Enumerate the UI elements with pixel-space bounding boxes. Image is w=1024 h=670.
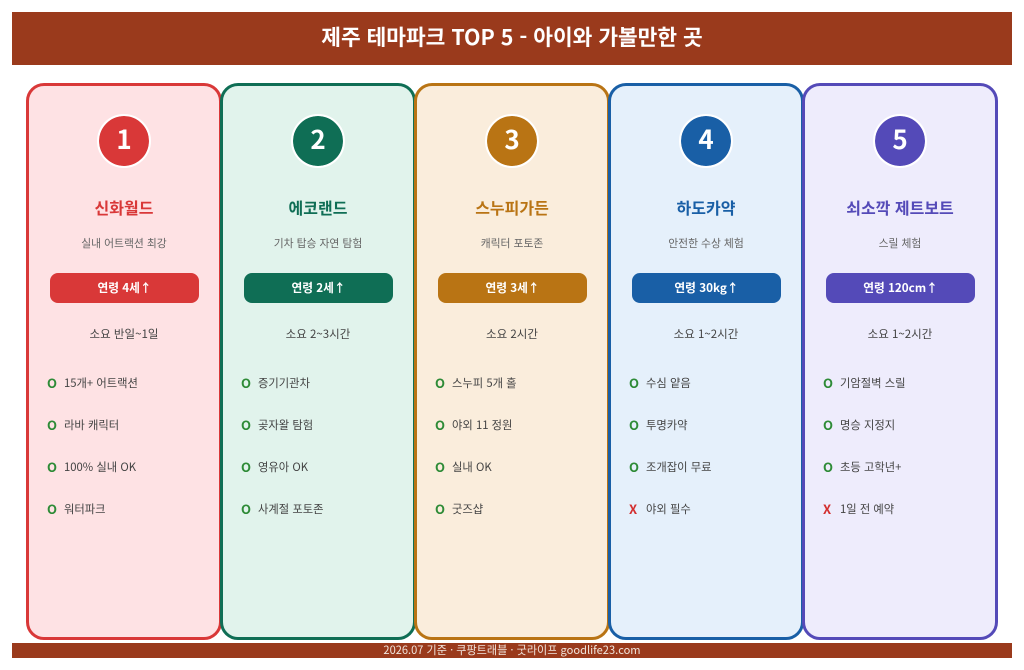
item: 기암절벽 스릴 — [840, 375, 906, 391]
panel: 스누피가든 — [414, 83, 610, 640]
park name: 신화월드 — [95, 195, 153, 219]
description: 안전한 수상 체험 — [668, 235, 744, 251]
item: 100% 실내 OK — [64, 459, 136, 475]
item: 명승 지정지 — [840, 417, 895, 433]
item — [435, 499, 483, 518]
description: 캐릭터 포토존 — [481, 235, 543, 251]
item — [241, 415, 313, 434]
item: 영유아 OK — [258, 459, 308, 475]
item: 투명카약 — [646, 417, 688, 433]
item — [47, 499, 106, 518]
age badge: 연령 3세↑ — [485, 279, 540, 296]
panel: 신화월드 — [26, 83, 222, 640]
item: X — [823, 499, 831, 518]
item: 실내 OK — [452, 459, 492, 475]
item — [823, 499, 894, 518]
item — [629, 499, 691, 518]
title: 제주 테마파크 TOP 5 - 아이와 가볼만한 곳 — [321, 21, 703, 52]
rank badge 4: 4 — [698, 120, 714, 157]
item: O — [241, 457, 251, 476]
item — [435, 415, 512, 434]
item — [629, 415, 688, 434]
description: 스릴 체험 — [879, 235, 921, 251]
item — [435, 457, 492, 476]
footer: 2026.07 기준 · 쿠팡트래블 · 굿라이프 goodlife23.com — [383, 642, 641, 658]
item: 1일 전 예약 — [840, 501, 894, 517]
item: O — [435, 457, 445, 476]
item: O — [823, 373, 833, 392]
item — [47, 457, 136, 476]
item — [823, 457, 901, 476]
rank badge 5 — [873, 114, 927, 168]
item: O — [823, 457, 833, 476]
item: O — [241, 499, 251, 518]
age badge: 연령 120cm↑ — [863, 279, 938, 296]
rank badge 3: 3 — [504, 120, 520, 157]
item — [47, 373, 138, 392]
item — [629, 457, 712, 476]
age badge — [632, 273, 781, 303]
item: 워터파크 — [64, 501, 106, 517]
item: 스누피 5개 홀 — [452, 375, 517, 391]
item — [241, 499, 324, 518]
item: X — [629, 499, 637, 518]
item — [241, 457, 308, 476]
item: O — [823, 415, 833, 434]
park name: 쇠소깍 제트보트 — [846, 195, 954, 219]
duration: 소요 반일~1일 — [90, 326, 158, 342]
rank badge 2 — [291, 114, 345, 168]
item — [823, 373, 906, 392]
item — [823, 415, 895, 434]
rank badge 1: 1 — [116, 120, 132, 157]
duration: 소요 1~2시간 — [868, 326, 932, 342]
park name: 에코랜드 — [289, 195, 347, 219]
item: O — [241, 373, 251, 392]
rank badge 1 — [97, 114, 151, 168]
item: 조개잡이 무료 — [646, 459, 712, 475]
park name: 스누피가든 — [475, 195, 549, 219]
age badge — [244, 273, 393, 303]
age badge: 연령 4세↑ — [97, 279, 152, 296]
item: 수심 얕음 — [646, 375, 691, 391]
item — [47, 415, 119, 434]
age badge — [50, 273, 199, 303]
title — [12, 12, 1012, 65]
duration: 소요 2~3시간 — [286, 326, 350, 342]
item: O — [47, 457, 57, 476]
item: O — [241, 415, 251, 434]
item: O — [629, 373, 639, 392]
item: O — [629, 457, 639, 476]
item: O — [435, 415, 445, 434]
item — [241, 373, 310, 392]
item: 라바 캐릭터 — [64, 417, 119, 433]
item — [435, 373, 517, 392]
item: 야외 11 정원 — [452, 417, 512, 433]
item: O — [435, 373, 445, 392]
panel: 하도카약 — [608, 83, 804, 640]
description: 기차 탑승 자연 탐험 — [274, 235, 362, 251]
item: 15개+ 어트랙션 — [64, 375, 138, 391]
age badge: 연령 2세↑ — [291, 279, 346, 296]
rank badge 5: 5 — [892, 120, 908, 157]
age badge: 연령 30kg↑ — [674, 279, 739, 296]
duration: 소요 2시간 — [486, 326, 538, 342]
rank badge 2: 2 — [310, 120, 326, 157]
park name: 하도카약 — [677, 195, 735, 219]
age badge — [826, 273, 975, 303]
panel: 에코랜드 — [220, 83, 416, 640]
duration: 소요 1~2시간 — [674, 326, 738, 342]
item: 증기기관차 — [258, 375, 310, 391]
item: O — [47, 499, 57, 518]
item: 야외 필수 — [646, 501, 691, 517]
item — [629, 373, 691, 392]
rank badge 3 — [485, 114, 539, 168]
item: 곶자왈 탐험 — [258, 417, 313, 433]
footer — [12, 643, 1012, 658]
panel: 쇠소깍 제트보트 — [802, 83, 998, 640]
item: 초등 고학년+ — [840, 459, 901, 475]
description: 실내 어트랙션 최강 — [81, 235, 167, 251]
item: 굿즈샵 — [452, 501, 483, 517]
item: O — [629, 415, 639, 434]
item: O — [47, 415, 57, 434]
item: O — [435, 499, 445, 518]
rank badge 4 — [679, 114, 733, 168]
item: O — [47, 373, 57, 392]
item: 사계절 포토존 — [258, 501, 324, 517]
age badge — [438, 273, 587, 303]
